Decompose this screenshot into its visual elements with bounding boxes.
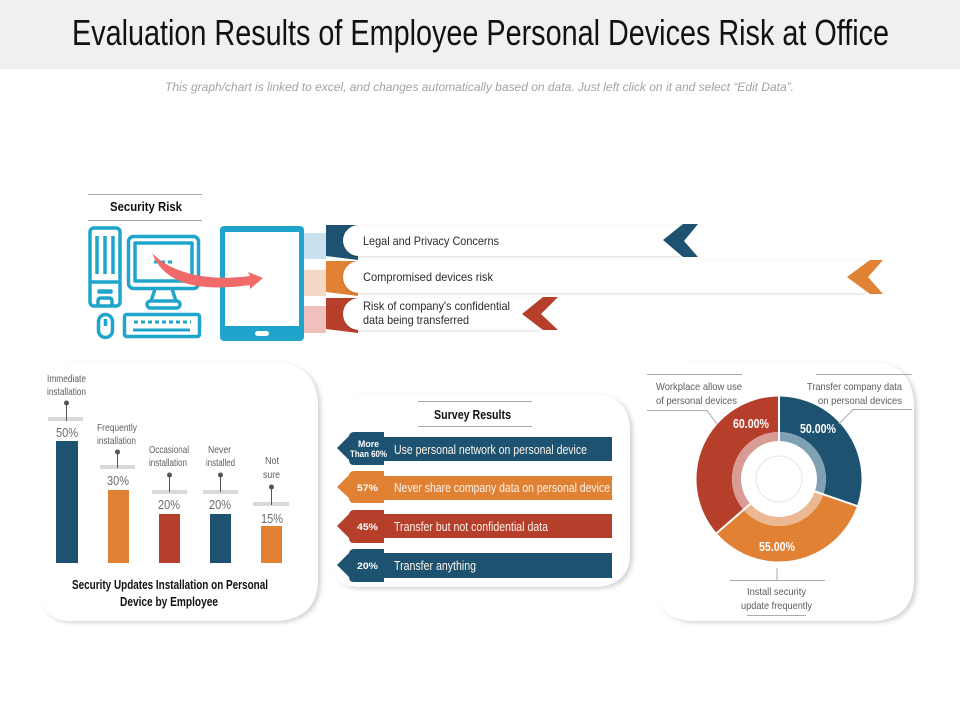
value: 55%: 55.00% (759, 540, 795, 554)
bar: not sure 15%: 15% (261, 511, 283, 526)
callout: transfer company data: Transfer company data (807, 381, 902, 393)
bar: occasional installation 20%: installation (149, 457, 187, 469)
bar: occasional installation 20%: Occasional (149, 444, 189, 456)
header band (0, 0, 960, 69)
chevron (522, 297, 558, 330)
chart caption: Security Updates Installation on Personal (72, 578, 268, 592)
bar: frequently installation 30%: Frequently (97, 422, 138, 434)
heading: security risk: Security Risk (110, 200, 182, 214)
chevron (847, 260, 883, 294)
donut chart (696, 395, 862, 562)
bar: not sure 15% (253, 455, 289, 563)
heading: survey results (418, 402, 532, 426)
survey row: 45%: 45% (357, 522, 379, 533)
arrow: data transfer (152, 253, 263, 289)
bar: frequently installation 30% (97, 422, 138, 563)
bar: never installed 20%: installed (206, 457, 235, 469)
callout: workplace allow use: Workplace allow use (656, 381, 742, 393)
chart caption (72, 578, 268, 609)
chart caption: Device by Employee (120, 595, 218, 609)
callout: transfer company data: on personal devices (818, 395, 902, 407)
survey row: 20%: 20% (357, 561, 379, 572)
light strips (304, 233, 326, 333)
survey row: more than 60%: More (358, 439, 379, 450)
callout: workplace allow use: of personal devices (656, 395, 737, 407)
callout: install security update (730, 568, 825, 616)
icon: tablet (220, 226, 304, 341)
risk row: confidential data: Risk of company's confidential (363, 299, 510, 313)
callout: transfer company data (807, 374, 912, 424)
bar: not sure 15%: Not (265, 455, 279, 467)
heading: security risk (88, 194, 202, 220)
survey row: more than 60%: Than 60% (350, 449, 387, 460)
risk row: legal and privacy (326, 224, 698, 260)
survey row: 57% (337, 471, 612, 503)
chevron (663, 224, 698, 257)
bar: immediate installation 50%: 50% (56, 425, 78, 440)
risk row: confidential data: data being transferred (363, 313, 469, 327)
bar: never installed 20%: Never (208, 444, 231, 456)
bar: never installed 20%: 20% (209, 497, 231, 512)
survey row: 45%: Transfer but not confidential data (394, 520, 548, 534)
risk row: compromised devices: Compromised devices risk (363, 270, 494, 284)
panel: survey results (331, 394, 630, 587)
survey row: 57%: Never share company data on personal device (394, 481, 610, 495)
bar: frequently installation 30%: 30% (107, 473, 129, 488)
icon: desktop computer (90, 228, 200, 338)
bar: immediate installation 50%: Immediate (47, 373, 86, 385)
risk row: confidential data (326, 297, 558, 333)
survey row: 20%: Transfer anything (394, 559, 476, 573)
callout: install security update: update frequently (741, 600, 813, 612)
bar: never installed 20% (203, 444, 238, 563)
survey row: more than 60%: Use personal network on personal device (394, 443, 587, 457)
section: security risk (88, 194, 883, 341)
value: 50%: 50.00% (800, 422, 836, 436)
survey row: 45% (337, 510, 612, 543)
panel: security updates bar chart (40, 362, 318, 621)
survey row: more than 60% (337, 432, 612, 465)
heading: survey results: Survey Results (434, 408, 511, 422)
bar: occasional installation 20% (149, 444, 189, 563)
panel: donut chart (647, 362, 914, 621)
bar: occasional installation 20%: 20% (158, 497, 180, 512)
value: 60%: 60.00% (733, 417, 769, 431)
callout: workplace allow use (647, 374, 742, 424)
risk row: legal and privacy: Legal and Privacy Concerns (363, 234, 499, 248)
callout: install security update: Install security (747, 586, 807, 598)
subtitle note: This graph/chart is linked to excel, and changes automatically based on data. Just left click on it and select “Edit Data”. (165, 80, 794, 94)
risk row: compromised devices (326, 260, 883, 296)
bar: immediate installation 50% (47, 373, 86, 563)
bar: immediate installation 50%: installation (47, 386, 86, 398)
survey row: 20% (337, 549, 612, 582)
bar: frequently installation 30%: installation (97, 435, 136, 447)
bar: not sure 15%: sure (263, 469, 280, 481)
survey row: 57%: 57% (357, 483, 379, 494)
